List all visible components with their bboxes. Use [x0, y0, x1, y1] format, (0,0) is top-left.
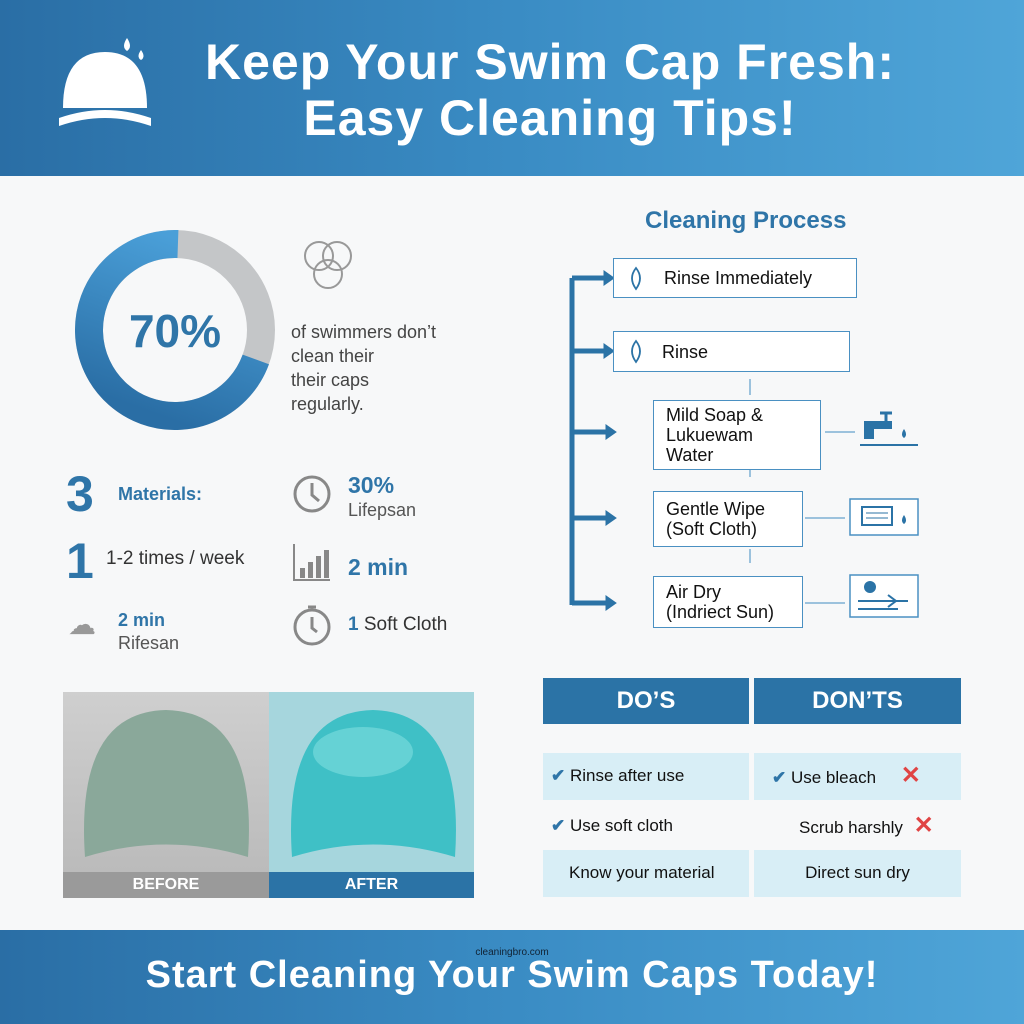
step 5: Air Dry [666, 582, 721, 602]
stat text [291, 322, 436, 414]
step 1: Rinse Immediately [664, 268, 812, 288]
do's and don'ts table: Direct sun dry [805, 863, 910, 882]
stats list: Rifesan [118, 633, 179, 653]
footer call to action: Start Cleaning Your Swim Caps Today! [146, 954, 878, 996]
header banner [0, 0, 1024, 176]
donut chart: 70%: 70% [129, 305, 221, 357]
step 4: (Soft Cloth) [666, 519, 757, 539]
icons: water drops [631, 266, 641, 364]
stat text: of swimmers don’t [291, 322, 436, 342]
icon: wipe screen [849, 498, 919, 536]
step 2 [613, 331, 850, 372]
stats list: Materials: [118, 484, 202, 504]
step 3: Mild Soap & [666, 405, 763, 425]
donut chart: 70% [75, 230, 275, 430]
title: Keep Your Swim Cap Fresh: [205, 34, 895, 90]
stats list: 1-2 times / week [106, 548, 244, 569]
stats list: 3 [66, 466, 94, 522]
heading: cleaning process: Cleaning Process [645, 207, 846, 234]
stats list: 30% [348, 472, 394, 498]
stats list [66, 466, 447, 653]
step 4: Gentle Wipe [666, 499, 765, 519]
step 2: Rinse [662, 342, 708, 362]
step 1 [613, 258, 857, 298]
stats list: ☁ [68, 609, 96, 640]
do's and don'ts table: ✔ Rinse after use [551, 766, 684, 785]
icon: faucet [860, 412, 918, 446]
before/after image: BEFORE [133, 876, 199, 893]
do's and don'ts table [543, 678, 961, 897]
stats list: 2 min [348, 554, 408, 580]
step 3 [653, 400, 821, 470]
do's and don'ts table: ✔ Use bleach ✕ [772, 762, 921, 789]
stats list: 2 min [118, 610, 165, 630]
stats list: 1 Soft Cloth [348, 614, 447, 635]
title: Easy Cleaning Tips! [303, 90, 797, 146]
icon: venn circles [304, 241, 352, 289]
title [205, 34, 895, 146]
icon: sun dry [849, 574, 919, 618]
step 4 [653, 491, 803, 547]
stat text: clean their [291, 346, 374, 366]
before/after image [63, 692, 474, 898]
do's and don'ts table: ✔ Use soft cloth [551, 816, 673, 835]
stat text: their caps [291, 370, 369, 390]
step 5: (Indriect Sun) [666, 602, 774, 622]
step 3: Water [666, 445, 713, 465]
stats list: 1 [66, 533, 94, 589]
do's and don'ts table: Know your material [569, 863, 715, 882]
icon: swim cap [59, 38, 151, 126]
do's and don'ts table: Scrub harshly ✕ [799, 812, 934, 839]
footer banner [0, 930, 1024, 1024]
before/after image: AFTER [345, 876, 398, 893]
flowchart [570, 258, 919, 628]
stats list: Lifepsan [348, 500, 416, 520]
do's and don'ts table: DON’TS [812, 687, 903, 714]
step 5 [653, 576, 803, 628]
stat text: regularly. [291, 394, 364, 414]
footer url: cleaningbro.com [475, 947, 549, 958]
do's and don'ts table: DO’S [617, 687, 675, 714]
step 3: Lukuewam [666, 425, 753, 445]
